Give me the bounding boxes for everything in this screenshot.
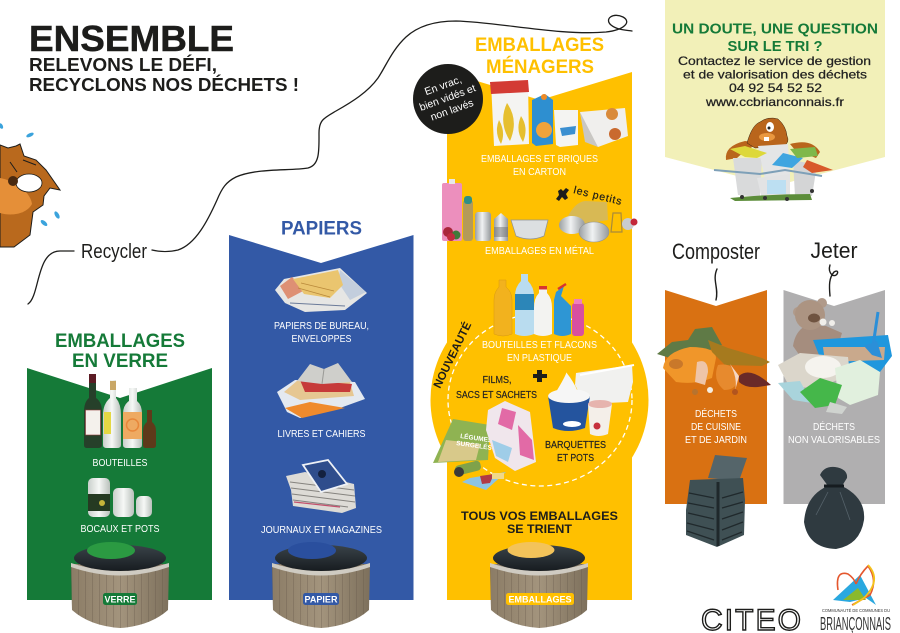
icon: packaging bin: EMBALLAGES — [508, 594, 572, 606]
icon: compost bin — [686, 455, 747, 547]
text: contact block: et de valorisation des déchets — [683, 68, 867, 82]
icon: glass bottles — [84, 374, 156, 448]
text: office papers label: PAPIERS DE BUREAU, — [274, 321, 369, 332]
text: novelty tag: NOUVEAUTÉ — [431, 320, 474, 390]
panel: glass background — [27, 368, 212, 600]
text: contact block: Contactez le service de gestion — [678, 54, 871, 68]
text: plastic bottles label — [482, 340, 597, 364]
icon: newspapers and magazines — [286, 460, 356, 513]
icon: paper bin — [272, 542, 370, 628]
text: metal label: EMBALLAGES EN MÉTAL — [485, 244, 594, 257]
text: cartons label: EMBALLAGES ET BRIQUES — [481, 154, 598, 165]
icon: small metal items — [559, 201, 638, 242]
text: residual waste label — [788, 420, 880, 446]
panel: pale yellow contact panel — [665, 0, 885, 186]
heading: glass packaging: EN VERRE — [72, 350, 168, 372]
icon: teddy bear, litter tray and residual waste — [778, 298, 892, 414]
text: films and bags label — [456, 374, 537, 401]
icon: black rubbish bag — [804, 467, 864, 549]
icon: worried beaver mascot — [0, 123, 61, 247]
text: residual waste label: DÉCHETS — [813, 420, 855, 433]
arrow: composter connector — [715, 269, 717, 300]
text: jars label: BOCAUX ET POTS — [80, 524, 160, 535]
icon: packaging bin — [490, 542, 588, 628]
text: compost label: DÉCHETS — [695, 407, 737, 420]
icon: paper bin: PAPIER — [304, 594, 338, 606]
text: contact block: SUR LE TRI ? — [728, 39, 823, 55]
text: all packaging is sorted: SE TRIENT — [507, 522, 573, 536]
icon: glass bin: VERRE — [104, 594, 136, 606]
text: trays and pots label: BARQUETTES — [545, 439, 606, 451]
icon: envelopes and office paper — [275, 268, 367, 312]
text: compost label: ET DE JARDIN — [685, 435, 747, 446]
title: RECYCLONS NOS DÉCHETS ! — [29, 74, 299, 95]
callout: loose, emptied, unwashed: En vrac, — [423, 74, 463, 98]
arrow: path line linking the sorting streams — [28, 15, 632, 304]
icon: cartons and bricks — [490, 80, 628, 147]
icon: books and notebooks — [277, 363, 365, 418]
heading: household packaging: MÉNAGERS — [486, 55, 594, 78]
text: trays and pots label — [545, 439, 606, 464]
callout: loose, emptied, unwashed: bien vidés et — [418, 82, 477, 114]
text: compost label: DE CUISINE — [691, 422, 741, 433]
panel: compost background — [665, 290, 767, 504]
icon: dashed new-sorting circle — [448, 314, 632, 486]
text: trays and pots label: ET POTS — [557, 452, 594, 464]
text: films and bags label: FILMS, — [482, 374, 512, 386]
panel: residual waste background — [784, 290, 885, 504]
icon: films, bags and pouches — [433, 401, 536, 490]
text: office papers label — [274, 321, 369, 345]
text: office papers label: ENVELOPPES — [292, 334, 352, 345]
title: ENSEMBLE — [29, 18, 234, 59]
text: newspapers label: JOURNAUX ET MAGAZINES — [261, 525, 382, 536]
text: bottles label: BOUTEILLES — [92, 458, 148, 469]
text: contact block: 04 92 54 52 52 — [729, 81, 822, 95]
icon: plus sign — [533, 370, 547, 382]
icon: glass jars — [88, 478, 152, 517]
heading: glass packaging — [55, 330, 185, 372]
title — [29, 18, 299, 95]
icon: plastic bottles and flasks — [494, 274, 584, 336]
icon: plus with small items note: les petits — [572, 184, 623, 208]
text: all packaging is sorted: TOUS VOS EMBALLAGES — [461, 509, 618, 523]
text: plastic bottles label: BOUTEILLES ET FLACONS — [482, 340, 597, 351]
heading: household packaging: EMBALLAGES — [475, 34, 604, 56]
text: compost label — [685, 407, 747, 446]
text: plastic bottles label: EN PLASTIQUE — [507, 353, 572, 364]
icon: films, bags and pouches: SURGELÉS — [456, 438, 493, 452]
text: Recycler label: Recycler — [81, 241, 147, 263]
text: contact block: www.ccbrianconnais.fr — [705, 95, 844, 109]
text: contact block: UN DOUTE, UNE QUESTION — [672, 22, 878, 38]
logo: Communauté de communes du Briançonnais — [820, 565, 891, 633]
callout: loose, emptied, unwashed: non lavés — [429, 97, 475, 124]
text: cartons label: EN CARTON — [513, 167, 566, 178]
icon: food and garden waste — [657, 327, 771, 395]
text: books label: LIVRES ET CAHIERS — [278, 429, 366, 440]
text: contact block — [672, 22, 878, 109]
text: residual waste label: NON VALORISABLES — [788, 435, 880, 446]
icon: beaver hugging recycling bins — [714, 118, 833, 201]
arrow: jeter connector — [829, 265, 838, 296]
icon: trays and yoghurt pots — [548, 365, 634, 436]
panel: paper background — [229, 235, 414, 600]
callout: loose, emptied, unwashed — [413, 64, 483, 134]
icon: films, bags and pouches: LÉGUMES — [460, 431, 493, 445]
text: all packaging is sorted — [461, 509, 618, 536]
icon: glass bin — [71, 542, 169, 628]
logo: Communauté de communes du Briançonnais: COMMUNAUTÉ DE COMMUNES DU — [822, 607, 890, 613]
heading: glass packaging: EMBALLAGES — [55, 330, 185, 352]
text: films and bags label: SACS ET SACHETS — [456, 389, 537, 401]
panel: household packaging background — [430, 72, 648, 600]
text: Composter heading: Composter — [672, 239, 760, 264]
text: cartons label — [481, 154, 598, 178]
title: RELEVONS LE DÉFI, — [29, 54, 217, 75]
heading: papers: PAPIERS — [281, 218, 362, 240]
text: Jeter heading: Jeter — [810, 238, 858, 263]
heading: household packaging — [475, 34, 604, 78]
icon: metal packaging — [442, 179, 548, 241]
